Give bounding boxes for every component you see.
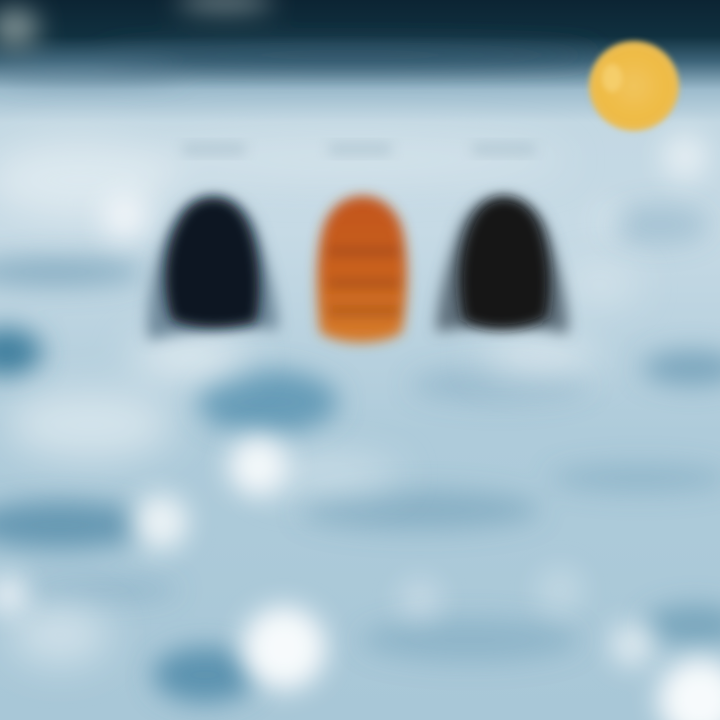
faint label: middle hat bbox=[328, 142, 392, 156]
faint label: left hat bbox=[182, 142, 246, 156]
icon: sun bbox=[589, 41, 679, 131]
icon: middle orange hat bbox=[317, 196, 407, 342]
faint label: right hat bbox=[472, 142, 536, 156]
icon: left navy hat bbox=[148, 197, 278, 340]
shaded snow drifts bbox=[0, 205, 720, 703]
bright snow patches bbox=[0, 135, 638, 665]
icon: right dark hat bbox=[436, 197, 568, 334]
dark horizon highlights bbox=[0, 0, 600, 80]
